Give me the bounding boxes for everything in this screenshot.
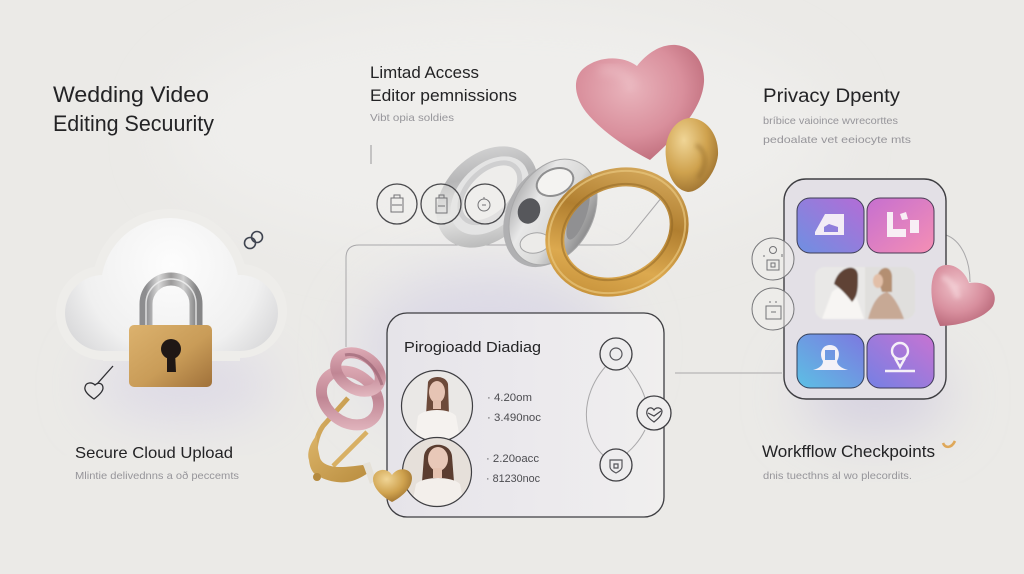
stat values: · 2.20oacc	[486, 453, 540, 465]
workflow loop	[586, 338, 671, 481]
icon: node heart	[637, 396, 671, 430]
stat values: · 4.20om	[487, 392, 532, 404]
main title: Wedding Video	[53, 82, 209, 107]
icon: side badge lower	[752, 288, 794, 330]
rose rings	[311, 345, 389, 436]
heading: limited access: Editor pemnissions	[370, 87, 517, 105]
connector line	[675, 372, 782, 374]
illustration: gold ring	[529, 149, 705, 315]
icon: clipboard	[421, 184, 461, 224]
tile: bottom left	[797, 334, 864, 388]
caption	[763, 115, 911, 146]
illustration: pink heart	[576, 45, 704, 160]
icon: cloud	[56, 209, 287, 365]
icon: timer	[465, 184, 505, 224]
caption: Vibt opia soldies	[370, 112, 454, 124]
icon: node top	[600, 338, 632, 370]
caption: Mlintie delivednns a oð peccemts	[75, 470, 239, 482]
panel: workflow checkpoints	[762, 441, 955, 482]
tile: bottom right	[867, 334, 934, 388]
device frame	[784, 179, 946, 399]
heading: workflow: Workfflow Checkpoints	[762, 443, 935, 461]
icon: heart on line	[85, 366, 113, 399]
caption: dnis tuecthns al wo plecordits.	[763, 470, 912, 482]
stat values: · 3.490noc	[487, 412, 542, 424]
main title	[53, 82, 215, 136]
stat values: · 81230noc	[486, 473, 540, 485]
icon: pink heart	[931, 265, 995, 326]
heading: privacy: Privacy Dpenty	[763, 86, 901, 107]
caption: pedoalate vet eeiocyte mts	[763, 134, 911, 146]
connector line	[346, 197, 662, 347]
main title: Editing Secuurity	[53, 111, 215, 136]
portrait: bride one	[400, 370, 475, 445]
panel: secure cloud upload	[56, 209, 287, 482]
panel: progress dialog	[387, 313, 671, 517]
dialog card	[387, 313, 664, 517]
arc connector	[946, 235, 970, 282]
illustration: silver rings	[416, 126, 615, 282]
portrait: bride two	[400, 438, 475, 510]
heading: dialog title: Pirogioadd Diadiag	[404, 339, 541, 356]
icon: chain link	[244, 232, 262, 248]
heading: limited access: Limtad Access	[370, 64, 479, 82]
panel: privacy	[752, 86, 995, 399]
gold clasp	[308, 398, 376, 484]
icon: gold heart	[373, 469, 412, 502]
heading: limited access	[370, 64, 517, 105]
tile: top left	[797, 198, 864, 253]
icon: gold mark	[943, 441, 955, 447]
caption: bríbice vaioince wvrecorttes	[763, 115, 898, 127]
photo: couple	[815, 267, 915, 319]
panel: limited access	[370, 45, 718, 315]
illustration: rose ring and gold clasp	[308, 345, 412, 502]
row of access icons	[377, 184, 505, 224]
tile: top right	[867, 198, 934, 253]
heading: secure cloud upload: Secure Cloud Upload	[75, 445, 233, 462]
icon: badge	[377, 184, 417, 224]
icon: side badge upper	[752, 238, 794, 280]
icon: padlock	[129, 279, 212, 387]
icon: node shield	[600, 449, 632, 481]
illustration: gold bead	[666, 118, 718, 192]
stat values	[486, 392, 542, 485]
